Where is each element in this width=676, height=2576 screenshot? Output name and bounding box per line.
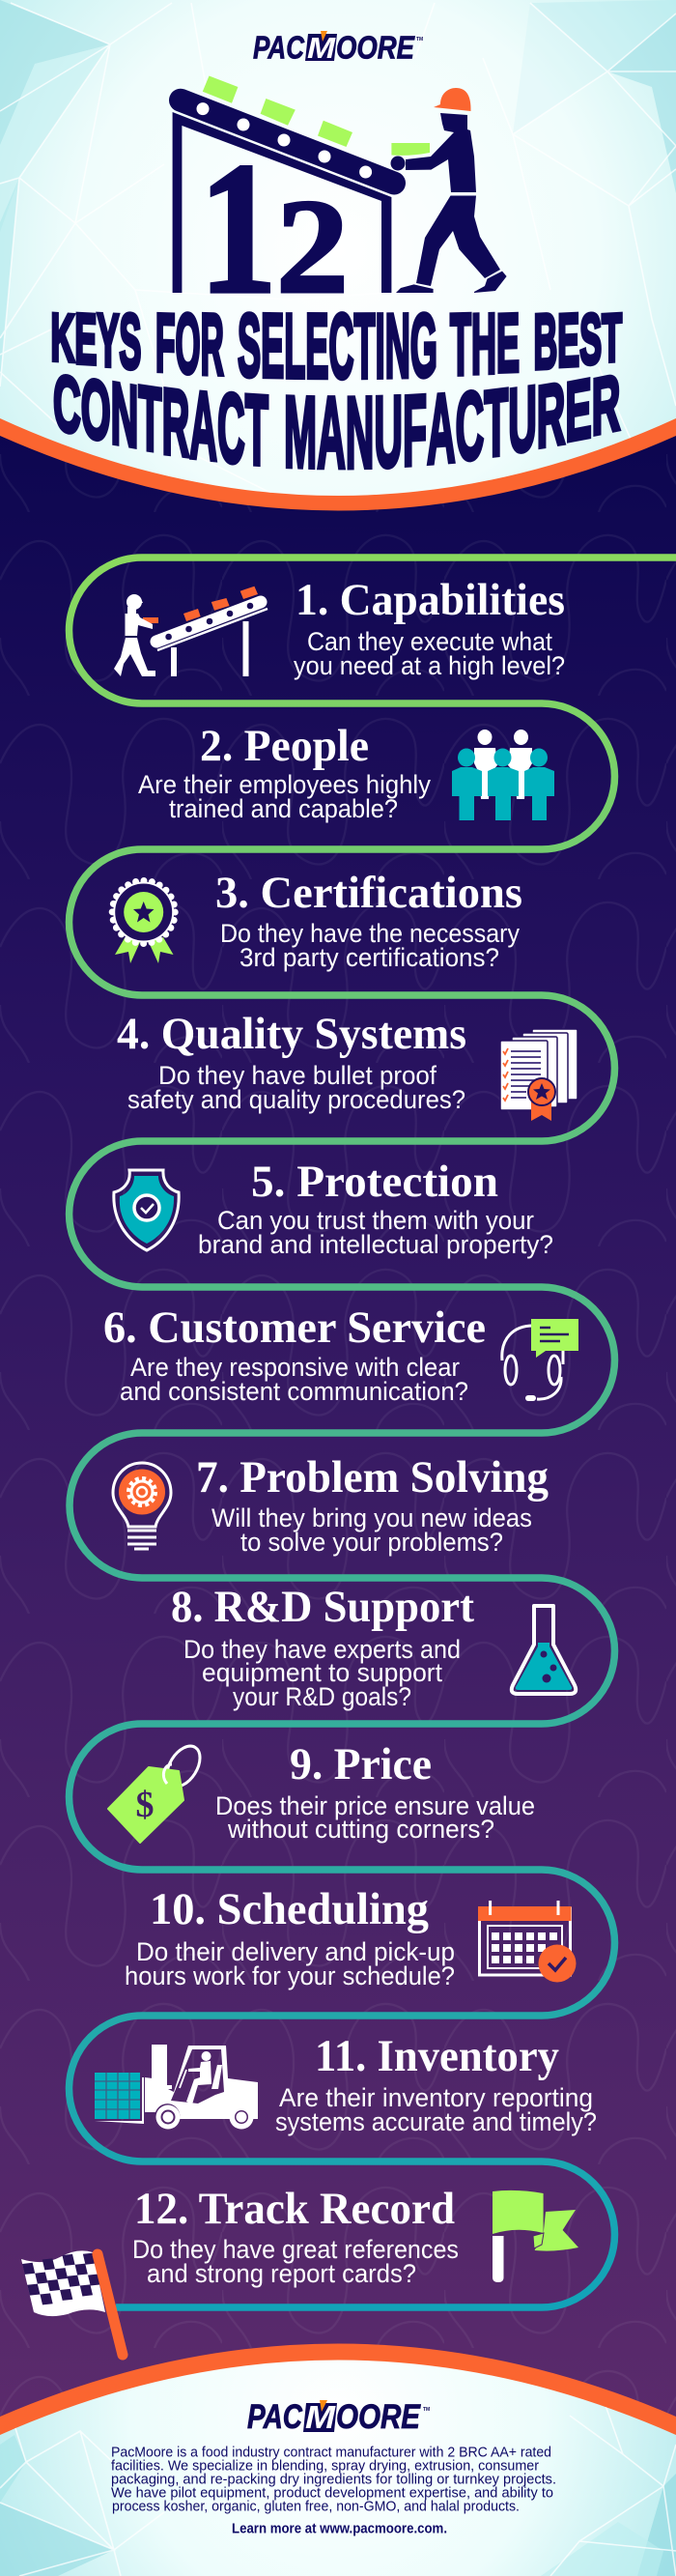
panel: key 5 protection [114,1157,553,1259]
title: G [410,295,437,395]
question: Do they have the necessary [220,919,521,948]
question [120,1353,468,1406]
header orange arc [0,411,676,510]
panel: key 3 certifications [112,868,522,972]
question: you need at a high level? [294,651,565,680]
question: equipment to support [202,1658,443,1687]
question [294,627,565,680]
logo: PacMoore: TM [416,37,423,43]
title: E [496,297,520,389]
heading: 2. People [200,721,369,771]
question: Are they responsive with clear [130,1353,460,1382]
question: Do they have great references [132,2235,459,2264]
title: T [602,299,622,376]
title: T [245,373,268,487]
question [275,2083,597,2136]
heading: 12. Track Record [134,2184,455,2234]
question: your R&D goals? [233,1682,411,1711]
question [127,1061,465,1114]
title: E [261,297,284,397]
question: Can you trust them with your [217,1206,534,1235]
worker [390,88,507,293]
question: Do their delivery and pick-up [136,1937,455,1966]
footer text: about PacMoore [111,2445,556,2514]
question [211,1503,532,1557]
title: N [346,376,374,490]
question: Do they have experts and [183,1635,461,1664]
icon: shield [114,1170,179,1250]
question: systems accurate and timely? [275,2107,597,2136]
panel: key 4 quality systems [117,1009,577,1121]
icon: checkered flag [21,2250,123,2355]
title: A [317,376,346,489]
title: I [376,296,385,398]
icon: award ribbon [112,881,175,963]
footer link: Learn more at www.pacmoore.com. [232,2520,447,2537]
title: Y [97,298,119,383]
logo: PacMoore: OORE [336,29,415,66]
title: T [484,368,508,476]
icon: worker at conveyor [114,587,268,676]
footer logo: PacMoore: OORE [336,2398,421,2436]
footer orange arc [0,2344,676,2576]
heading: 8. R&D Support [171,1582,474,1632]
panel: key 10 scheduling [125,1884,576,1990]
panel: key 12 track record [21,2184,578,2355]
title: H [471,297,496,392]
question: Are their employees highly [138,770,432,799]
title: T [450,296,471,393]
title: C [456,372,484,482]
question: trained and capable? [169,794,398,823]
title: E [557,298,579,383]
question: Do they have bullet proof [158,1061,437,1090]
title: S [119,299,141,386]
question: brand and intellectual property? [198,1230,553,1259]
panel: key 8 R&D support [171,1582,576,1711]
number 12 [199,124,349,333]
question [220,919,521,972]
question: to solve your problems? [240,1528,503,1557]
icon: price tag: $ [135,1785,155,1825]
panel: key 9 price [108,1739,535,1844]
title: K [50,299,75,376]
icon: headset with chat bubble [502,1319,578,1401]
question: Can they execute what [307,627,553,656]
heading: 6. Customer Service [103,1302,486,1353]
panel: key 6 customer service [103,1302,578,1406]
title: F [403,374,427,487]
title: A [189,371,217,482]
title: U [508,367,537,472]
title: T [353,296,376,398]
title: C [217,373,245,485]
heading: 10. Scheduling [150,1884,429,1934]
question: and consistent communication? [120,1377,468,1406]
title [50,295,622,490]
question [215,1791,535,1844]
illustration: conveyor with number 12 and worker [173,75,507,333]
number 12: 1 [199,124,277,333]
icon: calendar [478,1901,576,1983]
title: R [162,368,189,476]
logo: PacMoore: M [307,31,336,65]
title: O [176,297,201,392]
question: hours work for your schedule? [125,1961,455,1990]
conveyor frame [173,112,391,293]
footer logo: PacMoore: PAC [247,2398,303,2436]
heading: 4. Quality Systems [117,1009,466,1059]
rollers [197,102,372,178]
icon: price tag [108,1740,207,1843]
title: R [201,298,224,394]
footer text: about PacMoore: facilities. We specialize in blending, spray drying, extrusion, consumer [111,2458,539,2474]
question: and strong report cards? [147,2259,416,2288]
question [183,1635,461,1711]
footer text: about PacMoore: We have pilot equipment, product development expertise, and ability to [111,2485,553,2501]
panel: key 11 inventory [95,2031,597,2136]
winding track [69,558,676,2307]
title: R [592,358,620,452]
question [198,1206,553,1259]
heading: 11. Inventory [315,2031,559,2081]
heading: 5. Protection [251,1157,498,1207]
question [125,1937,455,1990]
title: O [81,361,111,460]
title: N [111,364,138,466]
header panel [0,0,676,496]
title: E [74,300,97,380]
title: E [305,296,328,398]
conveyor belt [181,100,394,184]
question [132,2235,459,2288]
question: Will they bring you new ideas [211,1503,532,1532]
footer logo: PacMoore [247,2398,430,2436]
footer text: about PacMoore: packaging, and re-packing dry ingredients for tolling or turnkey projects. [111,2472,556,2487]
question [138,770,432,823]
icon: green flag [493,2190,578,2282]
title: N [385,297,410,398]
title: R [537,363,565,466]
title: C [53,358,81,451]
footer logo: PacMoore: M [305,2399,337,2435]
heading: 7. Problem Solving [196,1452,549,1503]
title: M [284,375,317,489]
panel: key 7 problem solving [113,1452,549,1557]
footer logo: PacMoore: TM [423,2407,430,2413]
footer text: about PacMoore: PacMoore is a food industry contract manufacturer with 2 BRC AA+ rated [111,2445,551,2460]
question: Does their price ensure value [215,1791,535,1820]
title: U [374,374,403,489]
title: L [284,296,305,398]
conveyor boxes [203,75,430,156]
title: C [328,296,354,398]
icon: light bulb with gear [113,1463,171,1549]
title: S [238,295,261,395]
panel: key 2 people [138,721,554,823]
footer text: about PacMoore: process kosher, organic, gluten free, non-GMO, and halal products. [112,2499,520,2514]
icon: flask [512,1606,576,1694]
question: 3rd party certifications? [239,943,499,972]
icon: forklift with pallet [95,2045,258,2130]
panel: key 1 capabilities [114,575,565,680]
heading: 9. Price [290,1739,432,1789]
logo: PacMoore [253,29,423,66]
icon: checklist documents with seal [500,1029,577,1121]
footer panel [0,2360,676,2576]
question: Are their inventory reporting [279,2083,593,2112]
icon: team [452,730,554,820]
title: S [579,300,602,381]
question: without cutting corners? [227,1815,494,1844]
title: B [533,299,557,386]
title: F [155,296,175,389]
title: A [427,374,456,485]
title: T [138,368,162,472]
logo: PacMoore: PAC [253,29,305,66]
heading: 1. Capabilities [296,575,565,625]
number 12: 2 [276,172,349,322]
title: E [565,361,592,460]
question: safety and quality procedures? [127,1085,465,1114]
heading: 3. Certifications [215,868,522,918]
